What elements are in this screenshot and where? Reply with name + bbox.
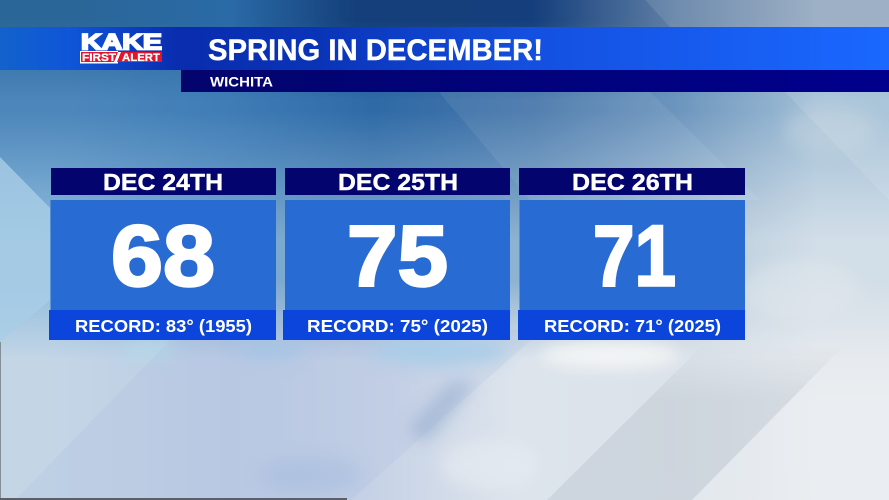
panel: Dec 25th bbox=[283, 168, 510, 340]
panel: Dec 26th: 71 bbox=[593, 208, 676, 304]
panel: Dec 25th: RECORD: 75° (2025) bbox=[307, 316, 488, 336]
logo: KAKE First Alert: ALERT bbox=[122, 52, 160, 64]
location bar: WICHITA bbox=[210, 74, 273, 90]
logo: KAKE First Alert: FIRST bbox=[82, 52, 116, 64]
panel: Dec 24th bbox=[49, 168, 276, 340]
light triangle at left edge bbox=[0, 157, 50, 342]
panel: Dec 25th: 75 bbox=[347, 208, 448, 304]
panel: Dec 24th: DEC 24TH bbox=[103, 169, 223, 195]
logo: KAKE First Alert: KAKE bbox=[81, 30, 162, 54]
logo: KAKE First Alert bbox=[80, 30, 162, 64]
header band bbox=[0, 27, 889, 70]
panel: Dec 24th: 68 bbox=[111, 208, 215, 304]
title: SPRING IN DECEMBER! bbox=[208, 34, 543, 67]
diagonal bands, upper area bbox=[645, 0, 889, 27]
panel: Dec 25th: DEC 25TH bbox=[338, 169, 458, 195]
panel: Dec 26th: DEC 26TH bbox=[572, 169, 693, 195]
location bar bbox=[181, 70, 889, 92]
diagonal bands, lower area bbox=[15, 330, 542, 500]
panel: Dec 24th: RECORD: 83° (1955) bbox=[75, 316, 252, 336]
panel: Dec 26th: RECORD: 71° (2025) bbox=[544, 316, 721, 336]
panel: Dec 26th bbox=[518, 168, 745, 340]
